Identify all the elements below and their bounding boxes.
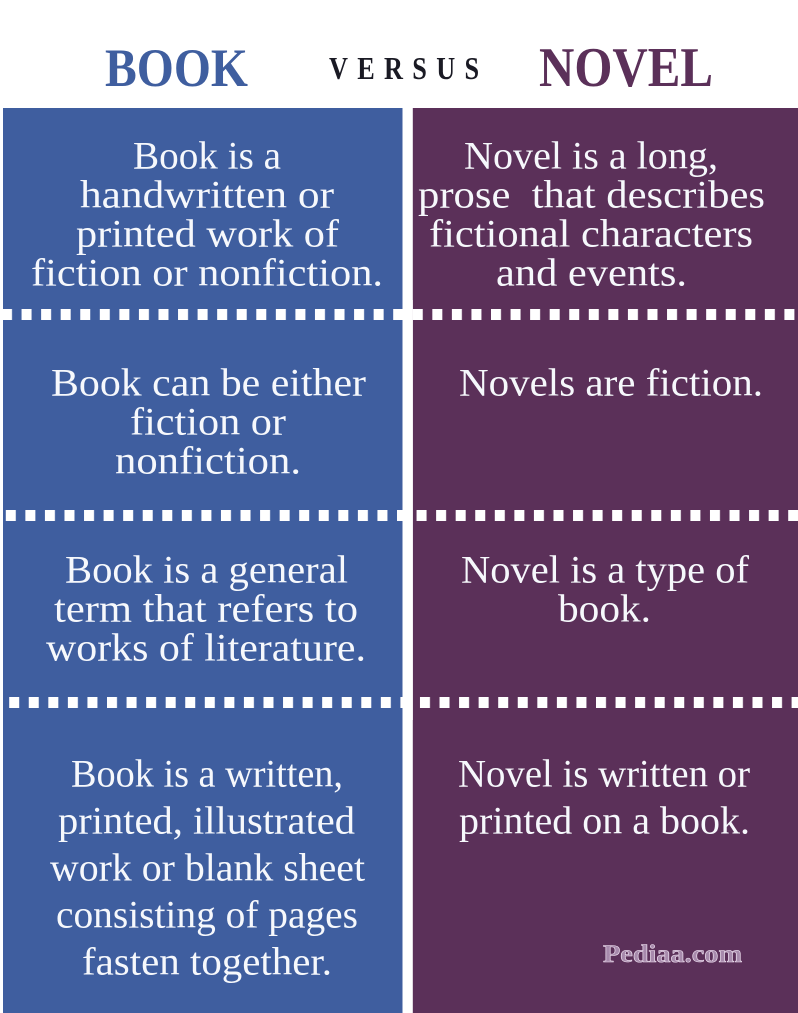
title: NOVEL: NOVEL xyxy=(539,37,713,99)
watermark: Pediaa.com: Pediaa.com xyxy=(603,941,742,968)
text: book format: consisting of pages xyxy=(56,894,358,937)
text: book definition: printed work of xyxy=(76,213,339,256)
text: book definition: fiction or nonfiction. xyxy=(31,252,383,295)
text: novel format: printed on a book. xyxy=(459,800,750,843)
text: book genre: fiction or xyxy=(130,401,286,444)
text: novel format xyxy=(458,753,750,843)
text: book format: work or blank sheet xyxy=(50,847,365,890)
text: book scope: Book is a general xyxy=(65,549,348,592)
text: book genre: Book can be either xyxy=(51,362,366,405)
text: book genre xyxy=(51,362,366,483)
text: book definition: handwritten or xyxy=(80,174,334,217)
text: novel scope: Novel is a type of xyxy=(461,549,749,592)
text: novel scope xyxy=(461,549,749,631)
title: BOOK: BOOK xyxy=(105,38,248,98)
text: novel scope: book. xyxy=(558,588,651,631)
text: book scope: term that refers to xyxy=(54,588,358,631)
title: VERSUS: VERSUS xyxy=(329,52,479,87)
text: book scope: works of literature. xyxy=(46,627,366,670)
text: novel definition: fictional characters xyxy=(429,213,753,256)
text: novel format: Novel is written or xyxy=(458,753,750,796)
text: book format: fasten together. xyxy=(82,941,332,984)
text: book format: Book is a written, xyxy=(71,753,343,796)
panel: book column background xyxy=(3,108,402,1013)
text: novel definition: Novel is a long, xyxy=(464,135,718,178)
text: novel definition xyxy=(418,135,765,295)
text: book genre: nonfiction. xyxy=(115,440,301,483)
text: book scope xyxy=(46,549,366,670)
text: novel genre: Novels are fiction. xyxy=(459,362,763,405)
text: book definition: Book is a xyxy=(133,135,281,178)
text: book format: printed, illustrated xyxy=(58,800,356,843)
text: book format xyxy=(50,753,365,984)
text: novel definition: and events. xyxy=(496,252,687,295)
text: book definition xyxy=(31,135,383,295)
text: novel definition: prose that describes xyxy=(418,174,765,217)
panel: novel column background xyxy=(413,108,798,1013)
